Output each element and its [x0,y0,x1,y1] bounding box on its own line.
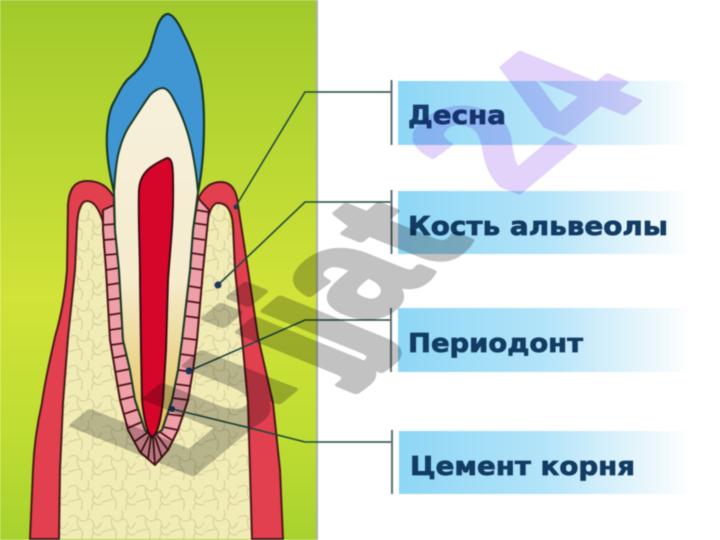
alveolar bone [59,201,252,539]
leader: gum [236,92,391,206]
label: Периодонт [390,308,692,372]
dentin and root [114,88,198,437]
label: Периодонт: Периодонт [408,329,583,359]
leader: root cementum [172,409,391,442]
label: Десна [390,80,692,145]
enamel crown [107,14,204,192]
watermark: lilac number: 4 [430,28,687,160]
label: Цемент корня [391,430,692,494]
leader: periodontium [189,320,391,371]
watermark: gray word: a [213,209,471,341]
gum: right [198,182,283,539]
watermark: gray word: j [189,265,417,371]
watermark: gray word: j [164,286,391,393]
watermark: gray word: t [278,176,510,287]
label: Десна: Десна [408,101,506,131]
background: green panel [0,0,317,540]
gum: left [30,181,114,539]
leader lines [172,92,391,442]
divider: panel edge [316,0,318,540]
periodontal ligament [103,198,209,465]
watermark: lilac number: 2 [359,79,616,211]
dental pulp [139,158,173,437]
watermark: gray word: u [75,320,338,456]
leader dots [169,204,238,412]
label: Кость альвеолы: Кость альвеолы [408,212,668,242]
watermark: gray word: L [29,358,292,495]
leader: alveolar bone [218,202,391,285]
label: Цемент корня: Цемент корня [410,452,635,482]
label: Кость альвеолы [390,190,692,254]
tooth diagram [30,14,283,539]
